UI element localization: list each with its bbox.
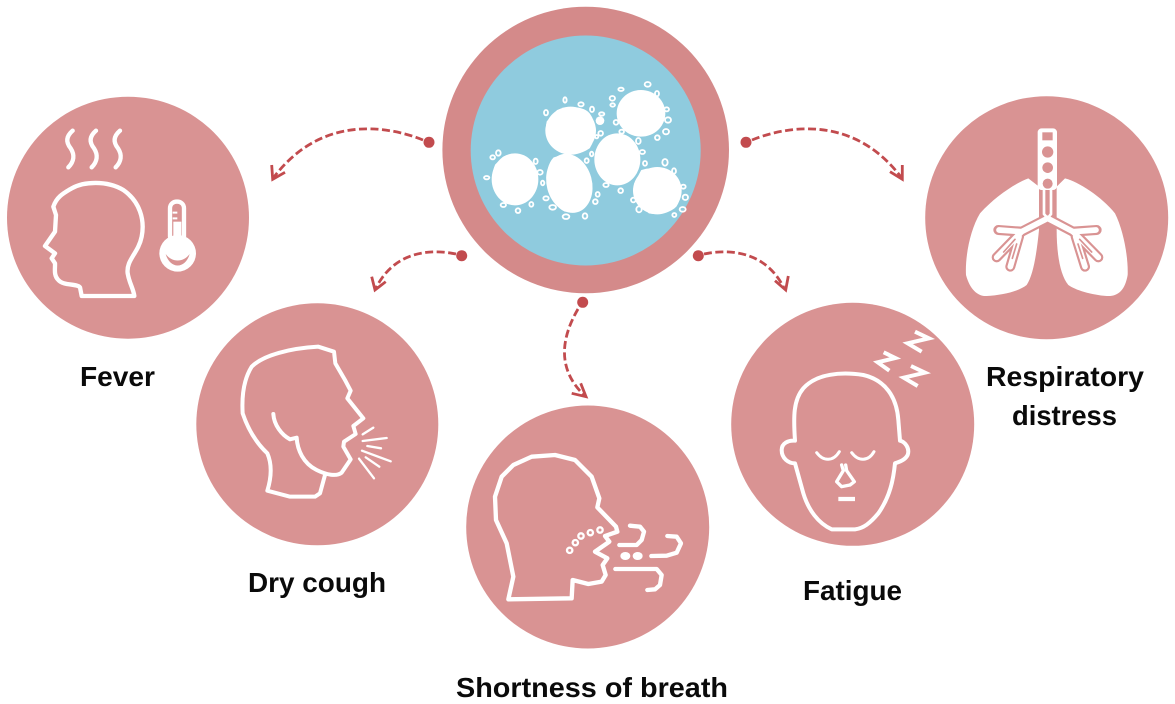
fatigue circle [731, 303, 974, 546]
outer ring [442, 7, 729, 293]
icon: head with steam and thermometer [45, 131, 196, 296]
panel: respiratory distress [925, 96, 1168, 339]
icon: sleeping face [782, 332, 929, 529]
virus particles [484, 82, 688, 219]
label: fever: Fever [80, 361, 155, 392]
label: dry cough: Dry cough [248, 567, 386, 598]
arrow: to dry cough [372, 250, 467, 290]
label: shortness of breath: Shortness of breath [456, 672, 728, 703]
respiratory distress circle [925, 96, 1168, 339]
label: respiratory distress [986, 361, 1144, 431]
icon: coughing head [242, 347, 391, 497]
label: fatigue: Fatigue [803, 575, 902, 606]
label: respiratory distress: Respiratory [986, 361, 1144, 392]
icon: head exhaling [495, 455, 681, 599]
panel: dry cough [196, 303, 438, 545]
arrow: to respiratory distress [740, 129, 902, 179]
shortness of breath circle [466, 406, 709, 648]
panel: fever [7, 97, 249, 339]
fever circle [7, 97, 249, 339]
dry cough circle [196, 303, 438, 545]
blue inner disc [471, 36, 701, 266]
panel: shortness of breath [466, 406, 709, 648]
icon: lungs [966, 128, 1128, 296]
arrow: to shortness of breath [564, 297, 588, 397]
label: respiratory distress: distress [1012, 400, 1117, 431]
arrow: to fatigue [693, 250, 788, 290]
central virus illustration [442, 7, 729, 293]
arrow: to fever [272, 129, 434, 179]
panel: fatigue [731, 303, 974, 546]
